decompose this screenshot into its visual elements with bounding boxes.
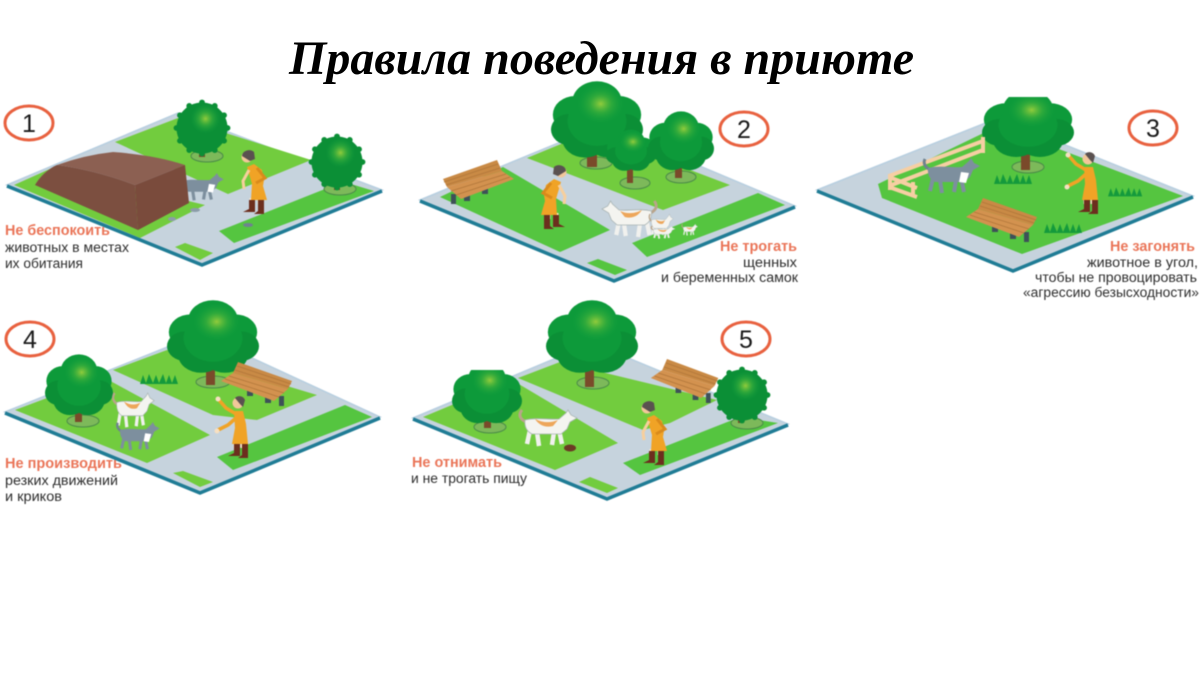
- caption 5: [411, 455, 527, 486]
- tree: [174, 100, 230, 162]
- woman: [214, 396, 248, 458]
- isometric park base: [5, 334, 380, 493]
- fence: [889, 137, 983, 197]
- tree: [714, 367, 770, 429]
- bench: [221, 362, 292, 406]
- woman: [642, 401, 667, 465]
- caption 1: Не беспокоить: [5, 223, 110, 239]
- dog: [180, 173, 224, 200]
- isometric park base: [7, 113, 382, 265]
- caption 5: Не отнимать: [412, 455, 502, 471]
- title: Правила поведения в приюте: [288, 32, 914, 85]
- badge 2: [720, 112, 768, 146]
- dog with puppies: [602, 201, 698, 239]
- bench: [966, 198, 1037, 242]
- dog: [520, 410, 577, 446]
- caption 5: и не трогать пищу: [411, 471, 527, 486]
- tree: [982, 90, 1074, 173]
- grass tuft: [140, 374, 178, 384]
- caption 4: Не производить: [5, 456, 122, 472]
- grass tufts: [994, 174, 1142, 233]
- caption 3: Не загонять: [1110, 239, 1195, 255]
- badge 4: 4: [23, 326, 37, 354]
- gray dog: [117, 422, 160, 450]
- panel: rule 2: [420, 81, 798, 285]
- food: [564, 444, 576, 452]
- caption 1: животных в местах: [5, 240, 129, 255]
- dog: [924, 158, 980, 193]
- woman: [242, 150, 267, 214]
- panel: rule 4: [5, 300, 380, 504]
- caption 1: [5, 223, 129, 271]
- badge 5: [722, 322, 770, 356]
- caption 2: [661, 239, 798, 285]
- caption 3: «агрессию безысходности»: [1023, 285, 1199, 300]
- badge 1: [5, 106, 53, 140]
- caption 3: [1023, 239, 1199, 300]
- panel: rule 3: [817, 90, 1199, 300]
- woman: [1064, 152, 1098, 214]
- caption 2: Не трогать: [720, 239, 797, 255]
- caption 3: чтобы не провоцировать: [1035, 270, 1197, 285]
- white dog: [113, 393, 154, 427]
- badge 5: 5: [739, 326, 753, 354]
- tree: [648, 111, 714, 183]
- caption 4: [5, 456, 122, 504]
- caption 4: и криков: [5, 489, 62, 504]
- woman: [541, 165, 566, 229]
- panel: rule 5: [411, 300, 788, 499]
- caption 1: их обитания: [5, 256, 83, 271]
- isometric park base: [413, 343, 788, 499]
- badge 1: 1: [22, 110, 36, 138]
- tree: [606, 130, 656, 189]
- badge 3: [1129, 111, 1177, 145]
- tree: [45, 354, 113, 427]
- tree: [167, 300, 259, 388]
- house: [35, 152, 189, 230]
- isometric park base: [420, 125, 795, 281]
- tree: [452, 362, 522, 433]
- badge 4: [6, 322, 54, 356]
- isometric park base: [817, 118, 1193, 271]
- caption 3: животное в угол,: [1087, 255, 1198, 270]
- badge 2: 2: [737, 116, 751, 144]
- tree: [546, 300, 638, 389]
- tree: [551, 81, 643, 169]
- caption 4: резких движений: [5, 473, 118, 488]
- bench: [651, 359, 718, 403]
- badge 3: 3: [1146, 115, 1160, 143]
- panel: rule 1: [5, 100, 382, 271]
- bench: [443, 160, 514, 204]
- tree: [309, 134, 365, 195]
- caption 2: и беременных самок: [661, 270, 798, 285]
- caption 2: щенных: [743, 255, 797, 270]
